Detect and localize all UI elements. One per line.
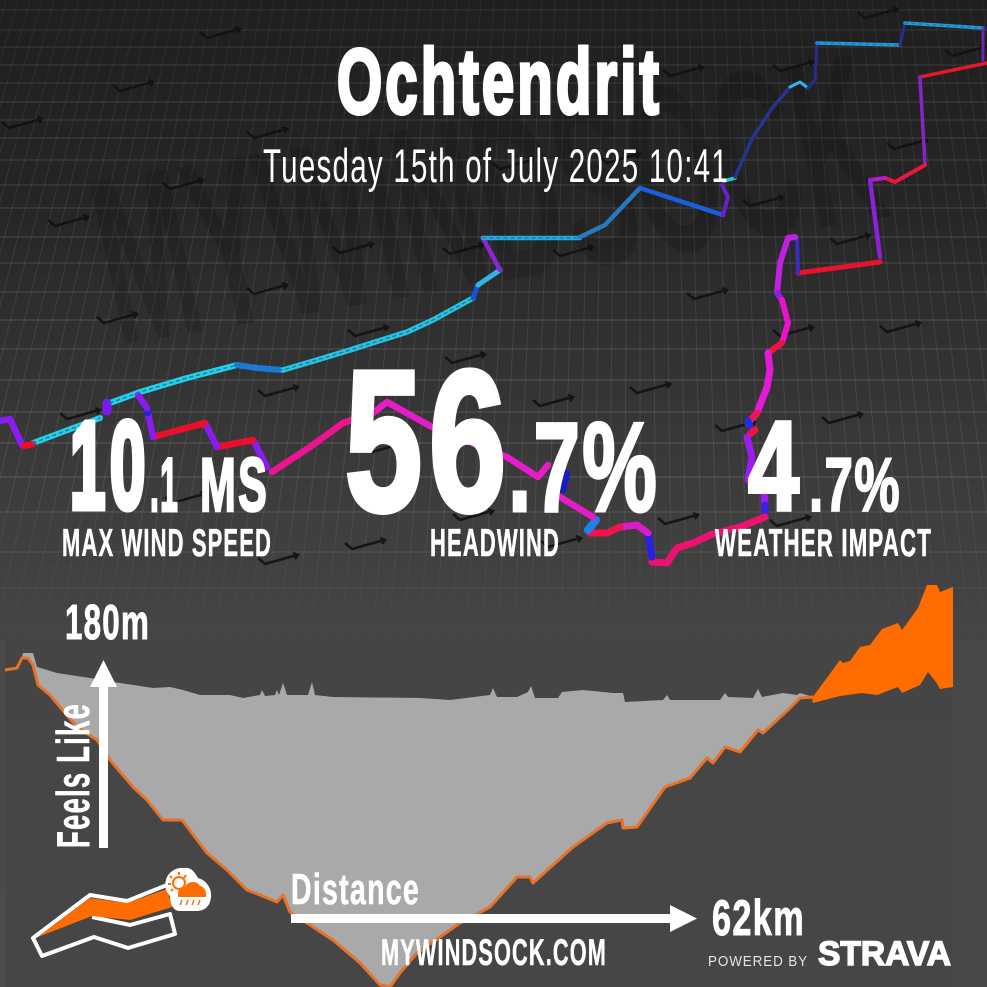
wind direction arrows	[2, 7, 985, 564]
ribbon base	[33, 914, 175, 956]
orange headwind gain area	[812, 585, 953, 703]
powered by strava mark: POWERED BY	[708, 953, 808, 970]
route line coloured by wind effect	[0, 23, 987, 563]
max elevation label: 180m	[65, 596, 150, 650]
vertical axis arrow	[90, 660, 117, 848]
website label: MYWINDSOCK.COM	[381, 932, 607, 973]
wind speed value: 10	[70, 398, 150, 535]
weather impact value: 4	[748, 395, 799, 537]
weather impact value: .7%	[809, 443, 901, 528]
background perspective grid	[0, 0, 987, 640]
powered by strava mark: STRAVA	[818, 935, 951, 973]
felt-elevation gray area	[22, 653, 813, 987]
elevation profile chart	[5, 585, 953, 987]
stat: max wind speed	[62, 398, 272, 565]
date subtitle: Tuesday 15th of July 2025 10:41	[263, 139, 729, 192]
headwind label: HEADWIND	[430, 522, 560, 565]
horizontal axis label: Distance	[291, 865, 420, 914]
orange elevation line	[5, 658, 813, 987]
wind speed label: MAX WIND SPEED	[62, 522, 272, 565]
weather impact value	[748, 395, 901, 537]
stat: headwind	[345, 330, 659, 565]
icon: mywindsock logo	[33, 868, 211, 956]
wind speed value: MS	[200, 443, 269, 528]
ribbon top	[38, 889, 172, 937]
powered by strava mark	[708, 935, 951, 973]
horizontal axis arrow	[291, 905, 697, 932]
title: Ochtendrit	[337, 31, 662, 133]
stat: weather impact	[715, 395, 932, 565]
cloud and sun badge	[165, 868, 211, 911]
headwind value: .7%	[508, 396, 659, 538]
headwind value: 56	[345, 330, 513, 553]
wind speed value: .1	[150, 443, 179, 528]
total distance label: 62km	[712, 890, 805, 946]
vertical axis label: Feels Like	[47, 703, 99, 848]
